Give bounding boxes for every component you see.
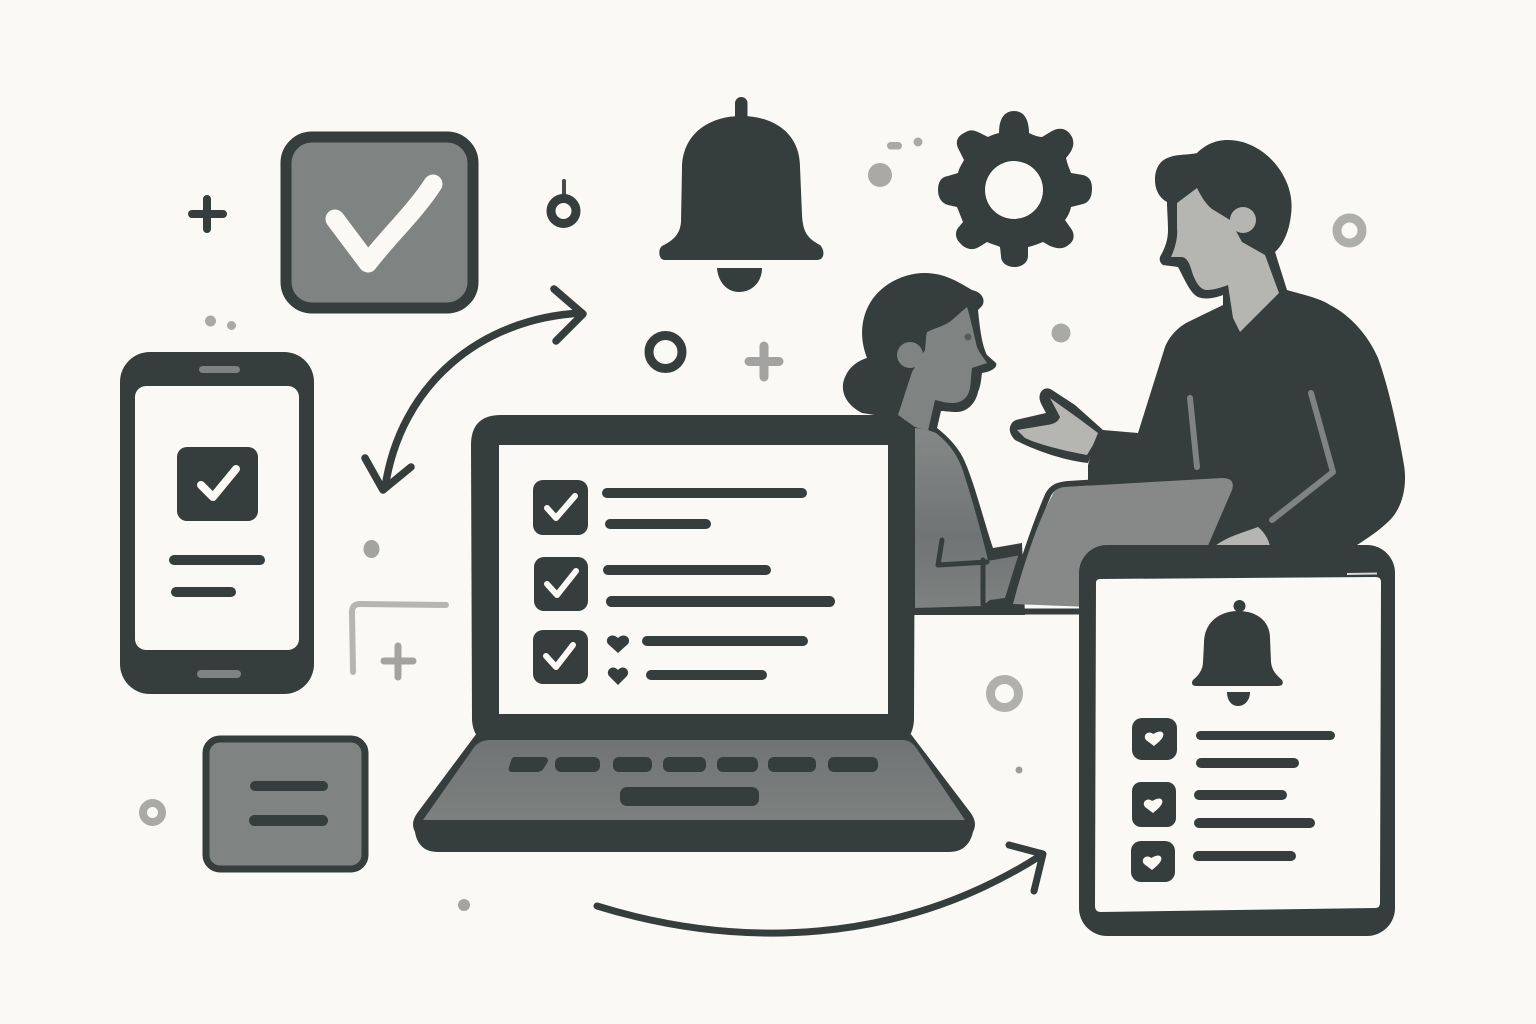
person: man [1010,140,1405,560]
panel: main laptop [413,415,1085,852]
icon: gray plus lower [384,646,413,677]
icon: phone check [177,447,258,521]
icon: ring lower left [143,803,162,822]
icon: dark ring [649,336,682,368]
panel: tablet [1079,545,1395,936]
laptop base [413,733,975,852]
decorative dot bottom [458,899,470,911]
decorative corner line [352,604,446,672]
icon: small dots by phone [205,316,236,330]
person: woman [843,273,1025,615]
icon: gear [938,111,1092,267]
checklist on laptop [533,480,835,685]
icon: ring light top right [1337,218,1362,243]
laptop: people's laptop [1010,478,1233,607]
icon: small ring with stem [551,181,576,224]
icon: menu card [206,739,365,869]
icon: ring near tablet [990,680,1018,708]
icon: large checkmark tile [286,137,473,308]
arrow: curved double-headed arrow [365,289,583,490]
icon: small plus top left [192,199,223,229]
panel: smartphone [120,352,314,694]
decorative dot near tablet [1016,766,1022,774]
arrow: lower curved arrow [597,845,1043,933]
checklist on tablet [1131,718,1335,882]
icon: tablet bell [1192,600,1283,706]
decorative dot left middle [364,540,380,558]
icon: gray plus [749,346,779,377]
laptop screen [471,415,915,740]
decorative dots near gear [868,138,1070,342]
icon: bell [659,97,823,292]
people group [843,140,1405,615]
